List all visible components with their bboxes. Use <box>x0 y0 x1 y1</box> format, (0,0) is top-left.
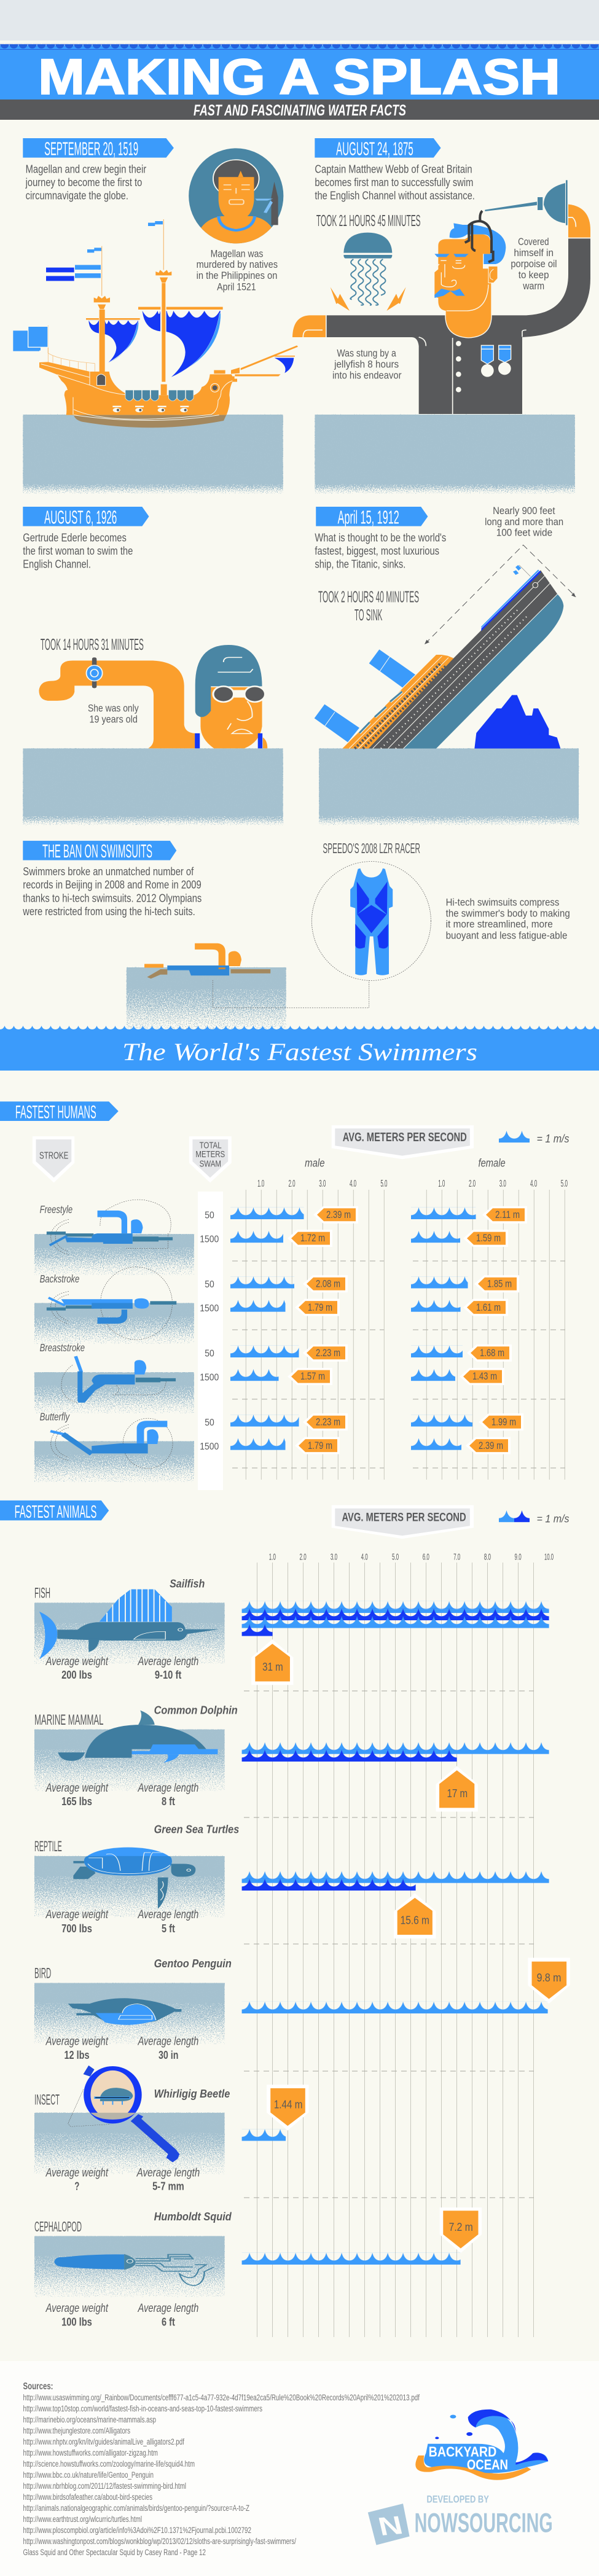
jellyfish caption: into his endeavor <box>332 370 402 381</box>
animal panel: dolphin <box>34 1704 238 1808</box>
jellyfish caption: jellyfish 8 hours <box>334 359 399 370</box>
header band <box>0 0 599 120</box>
swimsuit description: records in Beijing in 2008 and Rome in 2009 <box>23 878 202 891</box>
meter values: 50 <box>205 1210 214 1220</box>
logo: Backyard Ocean: BACKYARD <box>429 2443 496 2459</box>
animal panel: turtle: 700 lbs <box>61 1922 92 1935</box>
Webb description: becomes first man to successfully swim <box>315 176 473 189</box>
porpoise oil caption: warm <box>522 281 544 292</box>
animal panel: penguin: BIRD <box>34 1965 51 1981</box>
illustration: small swimmer <box>144 943 270 978</box>
water <box>127 967 286 1033</box>
age caption: She was only <box>88 703 139 714</box>
axis tick labels: 5.0 <box>380 1179 388 1189</box>
sources list: http://animals.nationalgeographic.com/animals/birds/gentoo-penguin/?source=A-to-Z <box>23 2504 249 2513</box>
legend wave <box>499 1510 530 1522</box>
date tag: September 20, 1519 <box>23 138 174 160</box>
logo: NowSourcing: N <box>375 2511 405 2541</box>
sources list <box>23 2381 420 2557</box>
Webb description: Captain Matthew Webb of Great Britain <box>315 163 472 176</box>
duration heading: TO SINK <box>354 607 382 624</box>
animal panel: whirligig beetle: 5-7 mm <box>152 2180 184 2193</box>
animal panel: penguin: 12 lbs <box>64 2050 90 2062</box>
sources list: http://www.washingtonpost.com/blogs/wonkblog/wp/2013/02/12/sloths-are-surprisingly-fast-swimmers/ <box>23 2537 296 2546</box>
axis tick labels <box>269 1552 554 1562</box>
axis tick labels: 3.0 <box>499 1179 506 1189</box>
banner: The World's Fastest Swimmers <box>0 1026 599 1071</box>
bar: penguin <box>242 2002 548 2013</box>
bar: beetle <box>242 2129 286 2141</box>
animal panel: dolphin: 165 lbs <box>61 1796 92 1808</box>
animal panel: dolphin: Common Dolphin <box>154 1704 238 1717</box>
Magellan caption: April 1521 <box>217 281 256 292</box>
animal panel: dolphin: 8 ft <box>162 1796 175 1808</box>
axis tick labels: 4.0 <box>361 1552 368 1562</box>
animal panel: turtle <box>34 1824 239 1935</box>
animal panel: penguin: 30 in <box>159 2050 178 2062</box>
panel: Matthew Webb 1875: TOOK 21 HOURS 45 MINUTES <box>316 212 421 230</box>
Ederle description: English Channel. <box>23 558 91 571</box>
tag: fastest humans <box>0 1101 119 1122</box>
illustration: ship <box>13 219 298 427</box>
Titanic description: ship, the Titanic, sinks. <box>315 558 405 571</box>
axis tick labels: 5.0 <box>392 1552 399 1562</box>
animal panel: sailfish: 200 lbs <box>61 1669 92 1681</box>
animal panel: humboldt squid: 6 ft <box>162 2316 175 2328</box>
illustration: Captain Webb <box>292 180 590 414</box>
animal panel: sailfish: 9-10 ft <box>155 1669 181 1681</box>
animal panel: humboldt squid: Average weight <box>45 2302 109 2314</box>
dimensions caption <box>485 505 563 538</box>
speed tags: female: 1.59 m <box>476 1232 501 1244</box>
animal panel: whirligig beetle: Average length <box>136 2166 200 2179</box>
date tag: August 24, 1875: AUGUST 24, 1875 <box>336 139 413 160</box>
logo: Backyard Ocean <box>415 2410 548 2480</box>
bars: sailfish <box>242 1601 549 1636</box>
speed tags: female: 1.85 m <box>487 1278 512 1290</box>
section: fastest humans: 5.0 <box>561 1179 568 1189</box>
header: total meters swam: TOTAL <box>200 1141 222 1150</box>
animal panel: whirligig beetle: ? <box>74 2180 79 2193</box>
stroke labels: Backstroke <box>40 1273 79 1285</box>
panel: Gertrude Ederle 1926: TOOK 14 HOURS 31 MINUTES <box>41 636 144 654</box>
section: fastest animals <box>0 1501 570 2337</box>
speed tags: male: 2.39 m <box>326 1209 351 1220</box>
Magellan description: Magellan and crew begin their <box>26 163 146 176</box>
porpoise oil caption: porpoise oil <box>511 259 557 270</box>
footer logos <box>368 2410 553 2545</box>
duration heading <box>318 588 419 624</box>
axis tick labels: 3.0 <box>331 1552 337 1562</box>
logo: NowSourcing <box>368 2504 553 2545</box>
axis tick labels: 3.0 <box>319 1179 326 1189</box>
header: stroke: STROKE <box>39 1150 68 1161</box>
speed tags: male: 2.23 m <box>316 1416 340 1427</box>
dimensions caption: 100 feet wide <box>496 527 552 538</box>
swimsuit description <box>23 865 202 918</box>
animal panel: dolphin: Average length <box>137 1782 198 1794</box>
date tag: August 24, 1875 <box>315 138 441 160</box>
speed tags: male: 1.79 m <box>308 1302 332 1313</box>
meter values: 1500 <box>200 1372 219 1383</box>
Magellan caption <box>197 248 278 292</box>
panel: ban on swimsuits: SPEEDO'S 2008 LZR RACER <box>323 840 420 856</box>
animal panel: dolphin: MARINE MAMMAL <box>34 1711 104 1728</box>
Ederle description <box>23 531 133 571</box>
panel: Magellan 1519 <box>13 138 298 494</box>
axis tick labels: 9.0 <box>515 1552 522 1562</box>
porpoise oil caption: Covered <box>518 236 549 248</box>
stroke panel: freestyle <box>34 1200 194 1275</box>
panel: ban on swimsuits <box>23 840 570 1033</box>
speed tags: male: 2.23 m <box>316 1347 340 1359</box>
sources list: http://www.ploscompbiol.org/article/info%3Adoi%2F10.1371%2Fjournal.pcbi.1002792 <box>23 2526 251 2535</box>
date tag: April 15, 1912: April 15, 1912 <box>338 507 399 528</box>
speed tags: female: 1.99 m <box>491 1416 516 1427</box>
speed tags: female: 1.43 m <box>472 1370 497 1382</box>
animal panel: humboldt squid: 100 lbs <box>61 2316 92 2328</box>
axis tick labels: 2.0 <box>288 1179 296 1189</box>
speed labels: turtle, penguin, beetle: 1.44 m <box>274 2099 302 2111</box>
header: stroke <box>33 1136 74 1183</box>
footer logos: DEVELOPED BY <box>427 2493 489 2505</box>
animal panel: penguin: Average weight <box>45 2035 109 2048</box>
animal panel: turtle: REPTILE <box>34 1838 62 1854</box>
speed label: squid: 7.2 m <box>449 2221 473 2233</box>
axis tick labels <box>257 1179 568 1189</box>
water <box>319 748 579 825</box>
animal panel: whirligig beetle: Average weight <box>45 2166 109 2179</box>
sources list: http://www.howstuffworks.com/alligator-zigzag.htm <box>23 2448 158 2457</box>
speed labels: sailfish and dolphin: 31 m <box>262 1661 283 1673</box>
speed tags: female <box>460 1206 527 1454</box>
animal panel: penguin <box>34 1957 232 2062</box>
animal panel: sailfish: Average length <box>137 1655 198 1668</box>
section: fastest animals: 10.0 <box>544 1552 554 1562</box>
column label: male: male <box>305 1157 325 1169</box>
swimsuit description: thanks to hi-tech swimsuits. 2012 Olympians <box>23 892 202 905</box>
speed tags: male: 2.08 m <box>316 1278 340 1290</box>
Titanic description: fastest, biggest, most luxurious <box>315 545 439 558</box>
logo: Backyard Ocean: OCEAN <box>467 2456 508 2473</box>
stroke panel: backstroke <box>34 1267 194 1344</box>
date tag: September 20, 1519: SEPTEMBER 20, 1519 <box>44 139 138 160</box>
header: avg meters per second <box>332 1505 474 1539</box>
date tag: August 6, 1926: AUGUST 6, 1926 <box>44 507 117 528</box>
illustration: LZR Racer swimsuit <box>311 862 431 980</box>
speed labels: turtle, penguin, beetle: 15.6 m <box>401 1914 429 1927</box>
speed labels: sailfish and dolphin: 17 m <box>447 1787 468 1800</box>
animal panel: whirligig beetle: INSECT <box>34 2091 60 2108</box>
Titanic description: What is thought to be the world's <box>315 531 446 544</box>
sources list: http://www.usaswimming.org/_Rainbow/Documents/cefff677-a1c5-4a77-932e-4d7f19ea2ca5/Rule%20Book%20Records%20April%201%202013.pdf <box>23 2393 420 2402</box>
bar: squid <box>242 2253 461 2265</box>
dashed connector <box>213 980 369 1008</box>
speed labels: sailfish and dolphin <box>251 1639 478 1812</box>
stroke labels <box>40 1204 85 1423</box>
header: avg meters per second: AVG. METERS PER SECOND <box>342 1511 466 1524</box>
bars: turtle <box>242 1871 549 1891</box>
animal panel: sailfish: Average weight <box>45 1655 109 1668</box>
axis tick labels: 2.0 <box>469 1179 476 1189</box>
axis tick labels: 7.0 <box>453 1552 460 1562</box>
banner: The World's Fastest Swimmers: The World's Fastest Swimmers <box>122 1038 477 1066</box>
meter values: 50 <box>205 1417 214 1428</box>
speed tags: male <box>288 1206 358 1454</box>
speed tags: female: 1.68 m <box>480 1347 504 1359</box>
Magellan caption: murdered by natives <box>197 259 278 270</box>
header: total meters swam: SWAM <box>200 1159 221 1169</box>
axis tick labels: 8.0 <box>484 1552 491 1562</box>
animal panel: penguin: Gentoo Penguin <box>154 1957 232 1970</box>
animal panel: humboldt squid: CEPHALOPOD <box>34 2219 82 2234</box>
sources list: http://www.top10stop.com/world/fastest-fish-in-oceans-and-seas-top-10-fastest-swimmers <box>23 2404 262 2413</box>
axis tick labels: 2.0 <box>299 1552 307 1562</box>
stroke labels: Breaststroke <box>40 1343 85 1354</box>
Magellan caption: Magellan was <box>211 248 263 259</box>
sources list: http://www.birdsofafeather.ca/about-bird-species <box>23 2492 152 2502</box>
swimsuit caption <box>446 897 570 941</box>
animal panel: humboldt squid: Average length <box>137 2302 198 2314</box>
animal panel: turtle: 5 ft <box>162 1922 175 1935</box>
meter values: 50 <box>205 1348 214 1359</box>
swimsuit caption: Hi-tech swimsuits compress <box>446 897 559 908</box>
animal panel: penguin: Average length <box>137 2035 198 2048</box>
axis tick labels: 1.0 <box>269 1552 276 1562</box>
Magellan description: journey to become the first to <box>25 176 142 189</box>
header: total meters swam <box>189 1136 232 1183</box>
axis tick labels: 1.0 <box>257 1179 264 1189</box>
tag: the ban on swimsuits <box>23 841 176 862</box>
jellyfish caption: Was stung by a <box>337 348 396 359</box>
column label: female: female <box>478 1157 506 1169</box>
speed tags: female: 1.61 m <box>476 1302 501 1313</box>
speed tags: male: 1.72 m <box>300 1232 325 1244</box>
animal panel: humboldt squid: Humboldt Squid <box>154 2211 232 2223</box>
speed tags: female: 2.11 m <box>495 1209 520 1220</box>
Titanic description <box>315 531 446 571</box>
bars: dolphin <box>242 1742 549 1762</box>
jellyfish caption <box>332 348 402 381</box>
water <box>315 415 575 494</box>
title: MAKING A SPLASH <box>38 49 560 105</box>
chart grid and meters column <box>198 1190 565 1490</box>
age caption <box>88 703 139 725</box>
Webb description <box>315 163 475 202</box>
sources list: http://science.howstuffworks.com/zoology/marine-life/squid4.htm <box>23 2459 195 2469</box>
sources list: http://www.thejunglestore.com/Alligators <box>23 2426 130 2435</box>
speed tags: male: 1.57 m <box>300 1370 325 1382</box>
sources list: http://www.earthtrust.org/wlcurric/turtles.html <box>23 2515 142 2524</box>
date tag: August 6, 1926 <box>23 507 149 528</box>
sources list: http://www.nhptv.org/kn/itv/guides/animalLive_alligators2.pdf <box>23 2437 184 2446</box>
speed labels: turtle, penguin, beetle: 9.8 m <box>537 1972 561 1985</box>
axis tick labels: 4.0 <box>350 1179 356 1189</box>
animal panel: whirligig beetle: Whirligig Beetle <box>154 2088 230 2100</box>
section: fastest animals: FASTEST ANIMALS <box>15 1502 96 1521</box>
panel: Gertrude Ederle 1926 <box>23 507 283 825</box>
meter values: 1500 <box>200 1303 219 1314</box>
porpoise oil caption: himself in <box>514 247 554 258</box>
age caption: 19 years old <box>90 714 138 725</box>
meter values: 1500 <box>200 1442 219 1452</box>
Ederle description: the first woman to swim the <box>23 545 133 558</box>
water <box>23 748 283 825</box>
animal panel: whirligig beetle <box>34 2066 230 2193</box>
sources list: Sources: <box>23 2381 53 2392</box>
tag: fastest humans: FASTEST HUMANS <box>15 1101 96 1122</box>
footer background <box>0 2361 599 2576</box>
axis tick labels: 1.0 <box>438 1179 445 1189</box>
Ederle description: Gertrude Ederle becomes <box>23 531 127 544</box>
panel: ban on swimsuits: THE BAN ON SWIMSUITS <box>42 841 152 862</box>
subtitle: FAST AND FASCINATING WATER FACTS <box>194 102 406 119</box>
speed tags: male: 1.79 m <box>308 1440 332 1451</box>
stroke panel: butterfly <box>34 1418 194 1482</box>
speed tags: female: 2.39 m <box>479 1440 503 1451</box>
animal panel: humboldt squid <box>34 2211 232 2328</box>
dimensions caption: Nearly 900 feet <box>493 505 555 517</box>
swimsuit caption: it more streamlined, more <box>446 919 553 930</box>
sources list: http://www.nbrhblog.com/2011/12/fastest-swimming-bird.html <box>23 2481 186 2491</box>
speed labels: turtle, penguin, beetle <box>267 1893 570 2131</box>
chart grid <box>244 1563 534 2337</box>
sources list: Glass Squid and Other Spectacular Squid by Casey Rand - Page 12 <box>23 2548 206 2557</box>
axis tick labels: 4.0 <box>530 1179 537 1189</box>
tag: fastest animals <box>0 1501 109 1521</box>
bars: male speed <box>230 1208 303 1450</box>
sources list: http://www.bbc.co.uk/nature/life/Gentoo_Penguin <box>23 2470 154 2480</box>
water <box>23 415 283 494</box>
meter values <box>200 1210 219 1452</box>
axis tick labels: 6.0 <box>423 1552 429 1562</box>
animal panel: turtle: Green Sea Turtles <box>154 1824 239 1836</box>
bars: female speed <box>411 1208 476 1450</box>
meter values: 1500 <box>200 1234 219 1244</box>
dimensions caption: long and more than <box>485 517 563 528</box>
date tag: April 15, 1912 <box>316 507 428 528</box>
stroke labels: Butterfly <box>40 1411 70 1423</box>
portrait: Magellan <box>189 148 283 248</box>
illustration: Ederle swimmer <box>39 645 267 748</box>
animal panel: sailfish <box>34 1578 225 1681</box>
header: avg meters per second: AVG. METERS PER SECOND <box>343 1130 467 1144</box>
header: avg meters per second <box>332 1125 474 1159</box>
animal panel: sailfish: Sailfish <box>170 1578 205 1590</box>
swimsuit description: Swimmers broke an unmatched number of <box>23 865 194 878</box>
porpoise oil caption: to keep <box>519 270 549 281</box>
panel: Matthew Webb 1875 <box>292 138 590 494</box>
Magellan description <box>25 163 146 202</box>
Magellan description: circumnavigate the globe. <box>26 189 128 202</box>
animal panel: dolphin: Average weight <box>45 1782 109 1794</box>
meter values: 50 <box>205 1279 214 1290</box>
sources list: http://marinebio.org/oceans/marine-mammals.asp <box>23 2415 156 2424</box>
legend label: = 1 m/s <box>537 1133 569 1146</box>
header: total meters swam: METERS <box>195 1150 225 1160</box>
animal panel: turtle: Average length <box>137 1908 198 1921</box>
stroke labels: Freestyle <box>40 1204 72 1216</box>
legend label: = 1 m/s <box>537 1513 570 1525</box>
illustration: jellyfish <box>331 233 406 311</box>
Magellan caption: in the Philippines on <box>197 270 277 281</box>
legend wave <box>499 1131 530 1142</box>
Webb description: the English Channel without assistance. <box>315 189 475 202</box>
animal panel: turtle: Average weight <box>45 1908 109 1921</box>
stroke panel: breaststroke <box>34 1356 194 1413</box>
porpoise oil caption <box>511 236 557 292</box>
swimsuit description: were restricted from using the hi-tech suits. <box>23 905 195 918</box>
illustration: sinking Titanic <box>315 545 576 749</box>
panel: Titanic 1912 <box>315 505 579 825</box>
panel: Titanic 1912: TOOK 2 HOURS 40 MINUTES <box>318 588 419 606</box>
speed label: squid <box>440 2207 482 2253</box>
animal panel: sailfish: FISH <box>34 1585 50 1601</box>
section: fastest humans <box>0 1101 569 1490</box>
